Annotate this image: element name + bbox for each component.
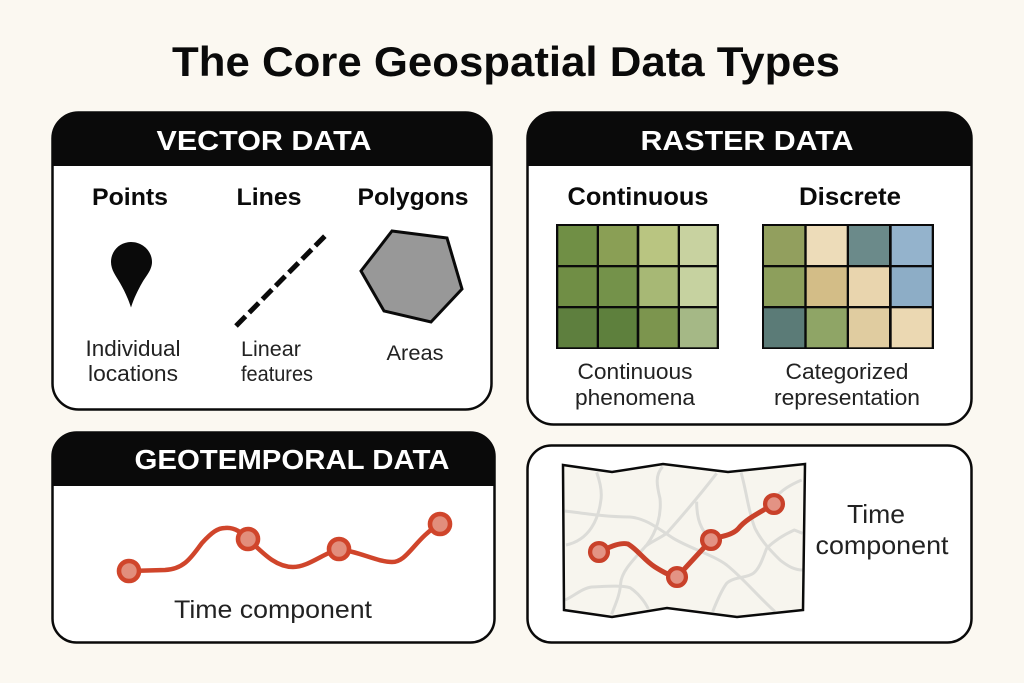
route point 4 <box>765 495 783 513</box>
label: linear features: features <box>241 363 313 386</box>
heading: geotemporal data <box>52 432 495 486</box>
chart: time path <box>119 514 450 581</box>
label: continuous phenomena: phenomena <box>575 385 696 410</box>
panel: vector data <box>52 112 492 410</box>
heading: raster data: RASTER DATA <box>640 125 854 156</box>
label: time component: component <box>816 530 949 560</box>
path point 2 <box>238 529 258 549</box>
heading: vector data <box>52 112 492 166</box>
label: categorized representation <box>774 359 920 410</box>
icon: dashed line <box>236 236 325 326</box>
icon: polygon <box>361 231 462 322</box>
label: linear features: Linear <box>241 338 301 361</box>
label: time component: Time <box>847 499 905 529</box>
map outline <box>563 464 805 617</box>
heading: geotemporal data: GEOTEMPORAL DATA <box>134 444 449 475</box>
path point 4 <box>430 514 450 534</box>
route on map <box>590 495 783 586</box>
heading: raster data <box>527 112 972 166</box>
path point 1 <box>119 561 139 581</box>
panel: map <box>528 446 972 642</box>
label: individual locations: locations <box>88 361 178 386</box>
subheading: lines: Lines <box>236 184 302 211</box>
label: individual locations: Individual <box>86 336 180 361</box>
route point 1 <box>590 543 608 561</box>
panel: raster data <box>527 112 972 424</box>
subheading: continuous: Continuous <box>568 183 708 211</box>
label: continuous phenomena <box>575 359 696 410</box>
label: continuous phenomena: Continuous <box>578 359 692 384</box>
heading: vector data: VECTOR DATA <box>156 125 372 156</box>
label: linear features <box>241 338 313 386</box>
label: individual locations <box>86 336 180 386</box>
label: time component <box>816 499 949 560</box>
label: areas: Areas <box>386 342 444 365</box>
title: The Core Geospatial Data Types <box>172 38 840 85</box>
route point 2 <box>668 568 686 586</box>
label: categorized representation: representation <box>774 385 920 410</box>
icon: folded map <box>563 464 805 617</box>
chart: discrete raster grid <box>762 224 934 349</box>
map roads <box>565 467 803 614</box>
chart: continuous raster grid <box>556 224 719 349</box>
route point 3 <box>702 531 720 549</box>
label: categorized representation: Categorized <box>786 359 908 384</box>
path point 3 <box>329 539 349 559</box>
panel: geotemporal data <box>52 432 495 642</box>
subheading: discrete: Discrete <box>799 183 901 211</box>
icon: map pin <box>111 242 152 308</box>
label: time component: Time component <box>174 596 372 624</box>
subheading: polygons: Polygons <box>358 184 468 211</box>
subheading: points: Points <box>92 184 168 211</box>
